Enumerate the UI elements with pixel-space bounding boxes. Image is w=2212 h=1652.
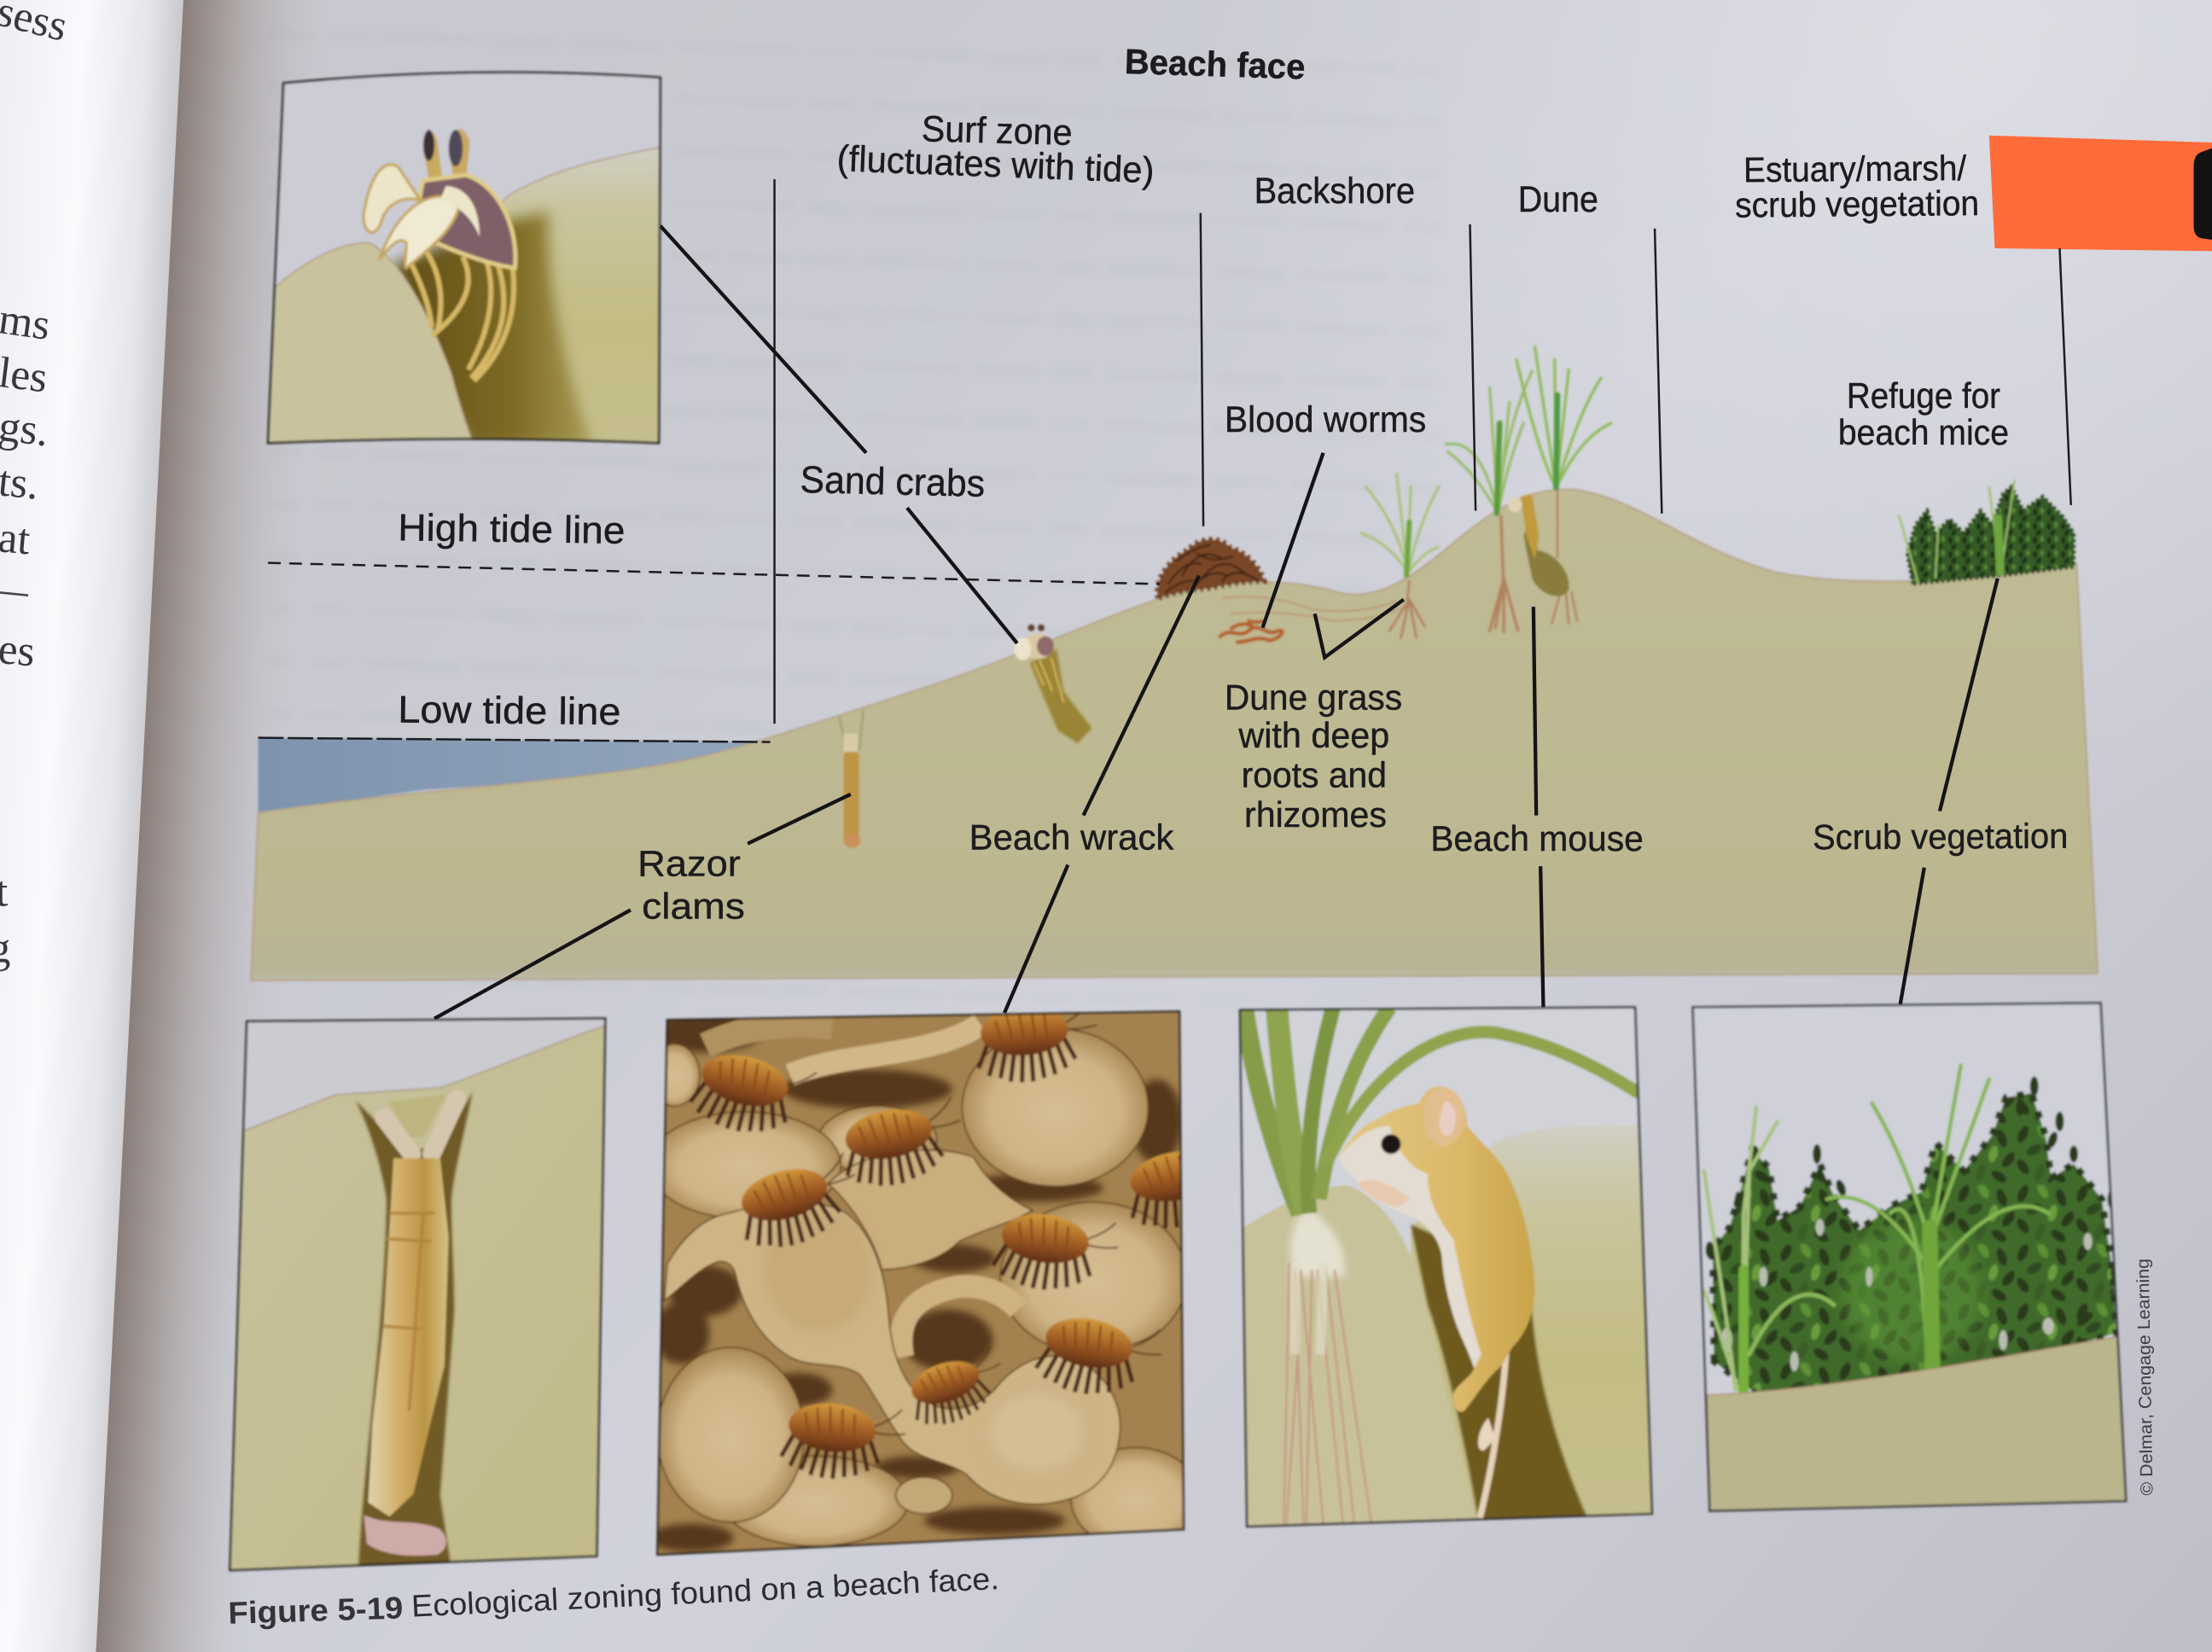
leader lines: [434, 226, 1998, 1019]
panel: sand crab: [262, 73, 663, 445]
label: estuary: [1735, 148, 1979, 225]
dune grass clumps tall: [1446, 347, 1611, 632]
label: beach wrack: Beach wrack: [969, 817, 1174, 857]
label: dune grass: with deep: [1237, 716, 1389, 755]
figure caption: [228, 1561, 1000, 1631]
panel: razor clam: [225, 1019, 609, 1573]
labels: [398, 42, 2068, 927]
label: razor clams: [637, 844, 745, 927]
dark gaps: [649, 1013, 1182, 1552]
heading: Beach face: Beach face: [1124, 42, 1306, 87]
figure caption: Figure 5-19: [228, 1591, 404, 1631]
label: refuge: beach mice: [1838, 413, 2009, 452]
beach mouse in burrow: [1508, 494, 1569, 596]
high tide dashed line: [268, 563, 1160, 584]
crab: [364, 129, 515, 381]
label: refuge: [1838, 376, 2009, 452]
loose leaves: [1706, 1076, 2124, 1329]
label: dune grass: Dune grass: [1225, 678, 1402, 718]
label: backshore: Backshore: [1254, 171, 1415, 212]
label: surf zone: Surf zone: [921, 108, 1073, 154]
label: low tide line: Low tide line: [398, 689, 621, 733]
label: razor clams: clams: [642, 886, 745, 927]
grass roots: [1284, 1211, 1371, 1524]
grass blades: [1704, 1065, 2048, 1393]
beach cross-section: [251, 347, 2098, 980]
label: dune grass: [1225, 678, 1402, 835]
bushes: [1713, 1093, 2116, 1399]
blood worms: [1219, 620, 1283, 642]
sand hills: [1411, 1125, 1657, 1524]
figure caption: Ecological zoning found on a beach face.: [410, 1561, 1000, 1624]
label: surf zone: (fluctuates with tide): [836, 138, 1155, 191]
scrub bush: [1899, 480, 2074, 584]
kelp bulbs: [649, 1024, 1201, 1549]
panel: beach mouse: [1238, 1007, 1657, 1529]
zone divider lines: [775, 179, 2071, 724]
label: surf zone: [836, 108, 1155, 191]
razor clam in profile: [840, 710, 864, 848]
facing page text fragments: [0, 0, 73, 973]
near sand hill: [262, 242, 474, 445]
bright centre: [1841, 1220, 1982, 1361]
clam shell: [368, 1158, 449, 1516]
beach wrack heap: [1157, 540, 1264, 598]
water: [259, 738, 773, 812]
credit line: © Delmar, Cengage Learning: [2133, 1259, 2157, 1496]
label: estuary: scrub vegetation: [1735, 183, 1979, 225]
sand hoppers: [688, 1013, 1181, 1480]
panel: beach wrack with sand hoppers: [655, 1009, 1186, 1558]
label: blood worms: Blood worms: [1225, 399, 1426, 440]
label: scrub vegetation: Scrub vegetation: [1813, 817, 2068, 857]
label: refuge: Refuge for: [1847, 376, 2000, 416]
label: high tide line: High tide line: [398, 507, 626, 552]
rhizomes: [1222, 596, 1405, 620]
panel: scrub vegetation: [1693, 1003, 2130, 1514]
label: estuary: Estuary/marsh/: [1743, 148, 1967, 189]
sand crab in profile: [1015, 625, 1091, 743]
dune grass clump small: [1361, 474, 1439, 637]
sand: [1707, 1336, 2130, 1514]
label: sand crabs: Sand crabs: [800, 459, 986, 505]
low tide dashed line: [259, 738, 771, 742]
burrow shadow: [393, 212, 592, 445]
burrow: [356, 1092, 473, 1568]
large S-shaped bulb: [665, 1202, 1121, 1504]
burrow shadow: [1411, 1224, 1590, 1529]
label: dune grass: rhizomes: [1244, 795, 1387, 835]
orange sticky tab: [1989, 136, 2212, 251]
grass leaves: [1244, 1007, 1639, 1213]
label: razor clams: Razor: [637, 844, 741, 885]
far sand hill: [470, 146, 661, 444]
clam foot: [364, 1515, 446, 1556]
label: beach mouse: Beach mouse: [1430, 819, 1644, 858]
sand: [225, 1024, 609, 1573]
gaps in foliage: [1721, 1219, 2092, 1371]
clam siphons: [384, 1099, 457, 1154]
mouse: [1339, 1086, 1535, 1518]
sand profile: [251, 489, 2098, 980]
label: dune: Dune: [1518, 179, 1598, 220]
label: dune grass: roots and: [1242, 756, 1387, 795]
